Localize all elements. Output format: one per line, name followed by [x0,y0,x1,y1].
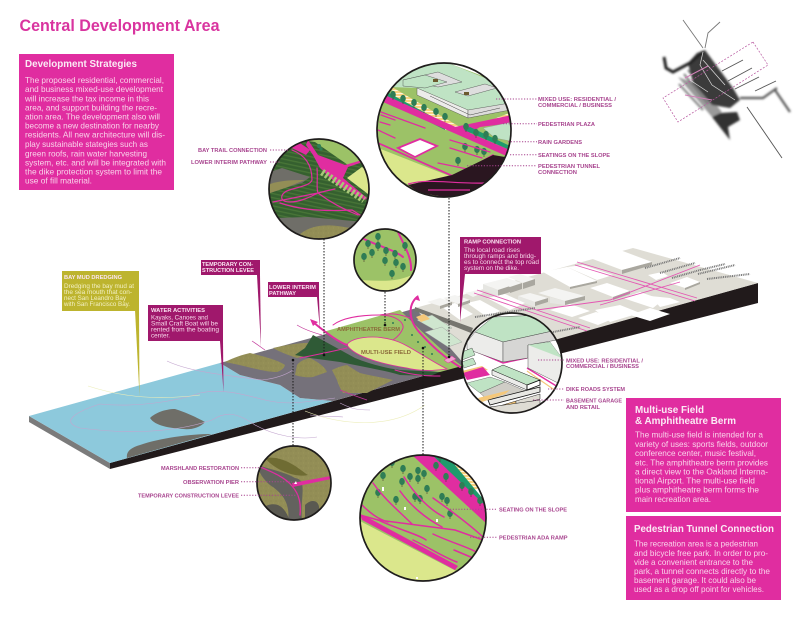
label: pedestrian plaza: PEDESTRIAN PLAZA [538,122,595,128]
detail circle: trees on berm [353,228,417,292]
label: mixed use near dike: COMMERCIAL / BUSINESS [566,364,639,370]
text block: multi-use field body: a direct view to the Oakland Interna- [635,467,768,476]
callout: temporary construction levee [201,260,261,347]
label: marshland restoration: MARSHLAND RESTORATION [161,466,239,472]
text block: development strategies body: will increase the tax income in this [24,94,149,103]
callout: lower interim pathway: LOWER INTERIM [269,285,316,291]
text block: multi-use field body: variety of uses: sports fields, outdoor [635,440,768,449]
text block: multi-use field body: plus amphitheatre berm forms the [635,486,759,495]
detail circle: bay trail connection [191,135,375,245]
callout: bay mud dredging: with San Francisco Bay. [63,302,130,308]
text block: pedestrian tunnel body: used as a drop off point for vehicles. [634,585,764,594]
callout: ramp connection: through ramps and bridg- [464,254,536,260]
detail circle: mixed use plaza [375,60,616,200]
dark strip along dike [415,307,473,333]
text block: development strategies body [24,76,166,186]
text block: pedestrian tunnel body: basement garage. It could also be [634,576,756,585]
text block: multi-use field body: tional Airport. The multi-use field [635,477,755,486]
heading: multi-use field: & Amphitheatre Berm [635,415,736,427]
label: basement garage and retail [566,398,622,411]
ramp structures [475,258,750,332]
callout: lower interim pathway [268,282,320,330]
site block model [29,248,758,469]
text block: multi-use field body [635,431,768,504]
heading: development strategies: Development Strategies [25,59,137,70]
label: mixed use near dike: MIXED USE: RESIDENTIAL / [566,358,643,364]
label: temporary construction levee: TEMPORARY CONSTRUCTION LEVEE [138,494,239,500]
block side faces [29,283,758,469]
site labels: MULTI-USE FIELD [361,350,411,356]
label: pedestrian tunnel connection: PEDESTRIAN TUNNEL [538,164,601,170]
label: pedestrian tunnel connection: CONNECTION [538,170,577,176]
label: mixed use residential commercial business: COMMERCIAL / BUSINESS [538,103,612,109]
text block: pedestrian tunnel body [634,540,770,594]
text block: multi-use field body: The multi-use field is intended for a [635,431,763,440]
label: dike roads system: DIKE ROADS SYSTEM [566,387,625,393]
text block: development strategies body: the dike protection system to limit the [25,168,162,177]
callout: bay mud dredging: Dredging the bay mud at [64,284,134,290]
text block: pedestrian tunnel body: vide a convenient entrance to the [634,558,753,567]
locator map [663,20,790,158]
label: observation pier: OBSERVATION PIER [183,480,239,486]
upper street lines [475,351,527,363]
detail circle: marshland [138,444,333,522]
mud patches [127,409,212,458]
callout: bay mud dredging [62,271,140,396]
top wedge [451,64,482,76]
text block: development strategies body: become a new destination for nearby [25,122,160,131]
detail circle: seating on the slope [358,453,568,585]
callout: temporary construction levee: TEMPORARY CON- [202,262,253,268]
callout: ramp connection: RAMP CONNECTION [464,240,521,246]
text block: development strategies body: The proposed residential, commercial, [25,76,164,85]
panel: development strategies [19,54,174,190]
text block: pedestrian tunnel body: and bicycle free park. In order to pro- [634,549,768,558]
road network [300,295,460,376]
text block: multi-use field body: conference center, music festival, [635,449,756,458]
callout: ramp connection [460,237,541,322]
multi-use field [347,337,447,370]
water surface [29,363,333,463]
label: rain gardens: RAIN GARDENS [538,140,582,146]
callout: bay mud dredging: BAY MUD DREDGING [64,275,122,281]
text block: development strategies body: use of fill material. [25,177,92,186]
text block: development strategies body: residents. All new architecture will dis- [25,131,165,140]
text block: development strategies body: ation area. The development also will [25,113,160,122]
heading: multi-use field [635,404,736,427]
land: mudflat [220,307,470,401]
text block: development strategies body: green roofs, rain water harvesting [25,149,147,158]
heading: pedestrian tunnel connection: Pedestrian Tunnel Connection [634,523,774,535]
callout: water activities: rented from the boating [151,327,219,333]
label: basement garage and retail: AND RETAIL [566,405,601,411]
label: basement garage and retail: BASEMENT GARAGE [566,398,622,404]
city base [415,248,758,365]
locator dashed rectangle [663,42,768,122]
dark green marsh band [295,335,440,376]
text block: development strategies body: area, and support building the recre- [25,103,157,112]
water route lines [71,325,425,438]
callout: bay mud dredging: nect San Leandro Bay [64,296,126,302]
label: bay trail connection: BAY TRAIL CONNECTION [198,148,267,154]
city roads [474,262,700,331]
text block: development strategies body: play sustainable stategies such as [25,140,148,149]
callout: water activities: WATER ACTIVITIES [151,308,205,314]
callout: ramp connection: es to connect the top road [464,260,539,266]
callout: water activities: Small Craft Boat will be [151,321,219,327]
panel: pedestrian tunnel connection [626,516,781,600]
label: pedestrian ada ramp: PEDESTRIAN ADA RAMP [499,536,568,542]
text block: development strategies body: and business mixed-use development [25,85,164,94]
label: mixed use residential commercial business: MIXED USE: RESIDENTIAL / [538,97,616,103]
title: Central Development Area [20,17,220,35]
callout: water activities [148,305,224,392]
text block: pedestrian tunnel body: park, a tunnel connects directly to the [634,567,770,576]
callout: bay mud dredging: the sea mouth that con- [64,290,132,296]
text block: multi-use field body: etc. The amphitheatre berm provides [635,458,768,467]
detail circle: mixed use and dike roads [460,312,643,416]
label: lower interim pathway: LOWER INTERIM PATHWAY [191,160,267,166]
site labels: AMPHITHEATRE BERM [337,327,400,333]
label: mixed use residential commercial business [538,97,616,109]
text block: development strategies body: system, etc. and will be integrated with [25,159,166,168]
callout: ramp connection: system on the dike. [464,266,519,272]
callout: ramp connection: The local road rises [464,248,520,254]
callout: water activities: center. [151,333,170,339]
callout: temporary construction levee: STRUCTION LEVEE [202,268,254,274]
city buildings [427,250,700,325]
text block: pedestrian tunnel body: The recreation area is a pedestrian [634,540,758,549]
panel: multi-use field and amphitheatre berm [626,398,781,512]
mixed-use terraces near dike [416,314,462,363]
label: pedestrian tunnel connection [538,164,601,176]
amphitheatre berm [323,310,462,372]
label: mixed use near dike [566,358,643,370]
callout: lower interim pathway: PATHWAY [269,291,296,297]
leader lines [292,198,450,455]
callout: water activities: Kayaks, Canoes and [151,315,208,321]
label: seating on the slope: SEATING ON THE SLOPE [499,508,567,514]
text block: multi-use field body: main recreation area. [635,495,711,504]
site labels [337,327,411,356]
marshland [225,343,393,393]
heading: multi-use field: Multi-use Field [635,404,704,416]
label: seatings on the slope: SEATINGS ON THE SLOPE [538,153,610,159]
